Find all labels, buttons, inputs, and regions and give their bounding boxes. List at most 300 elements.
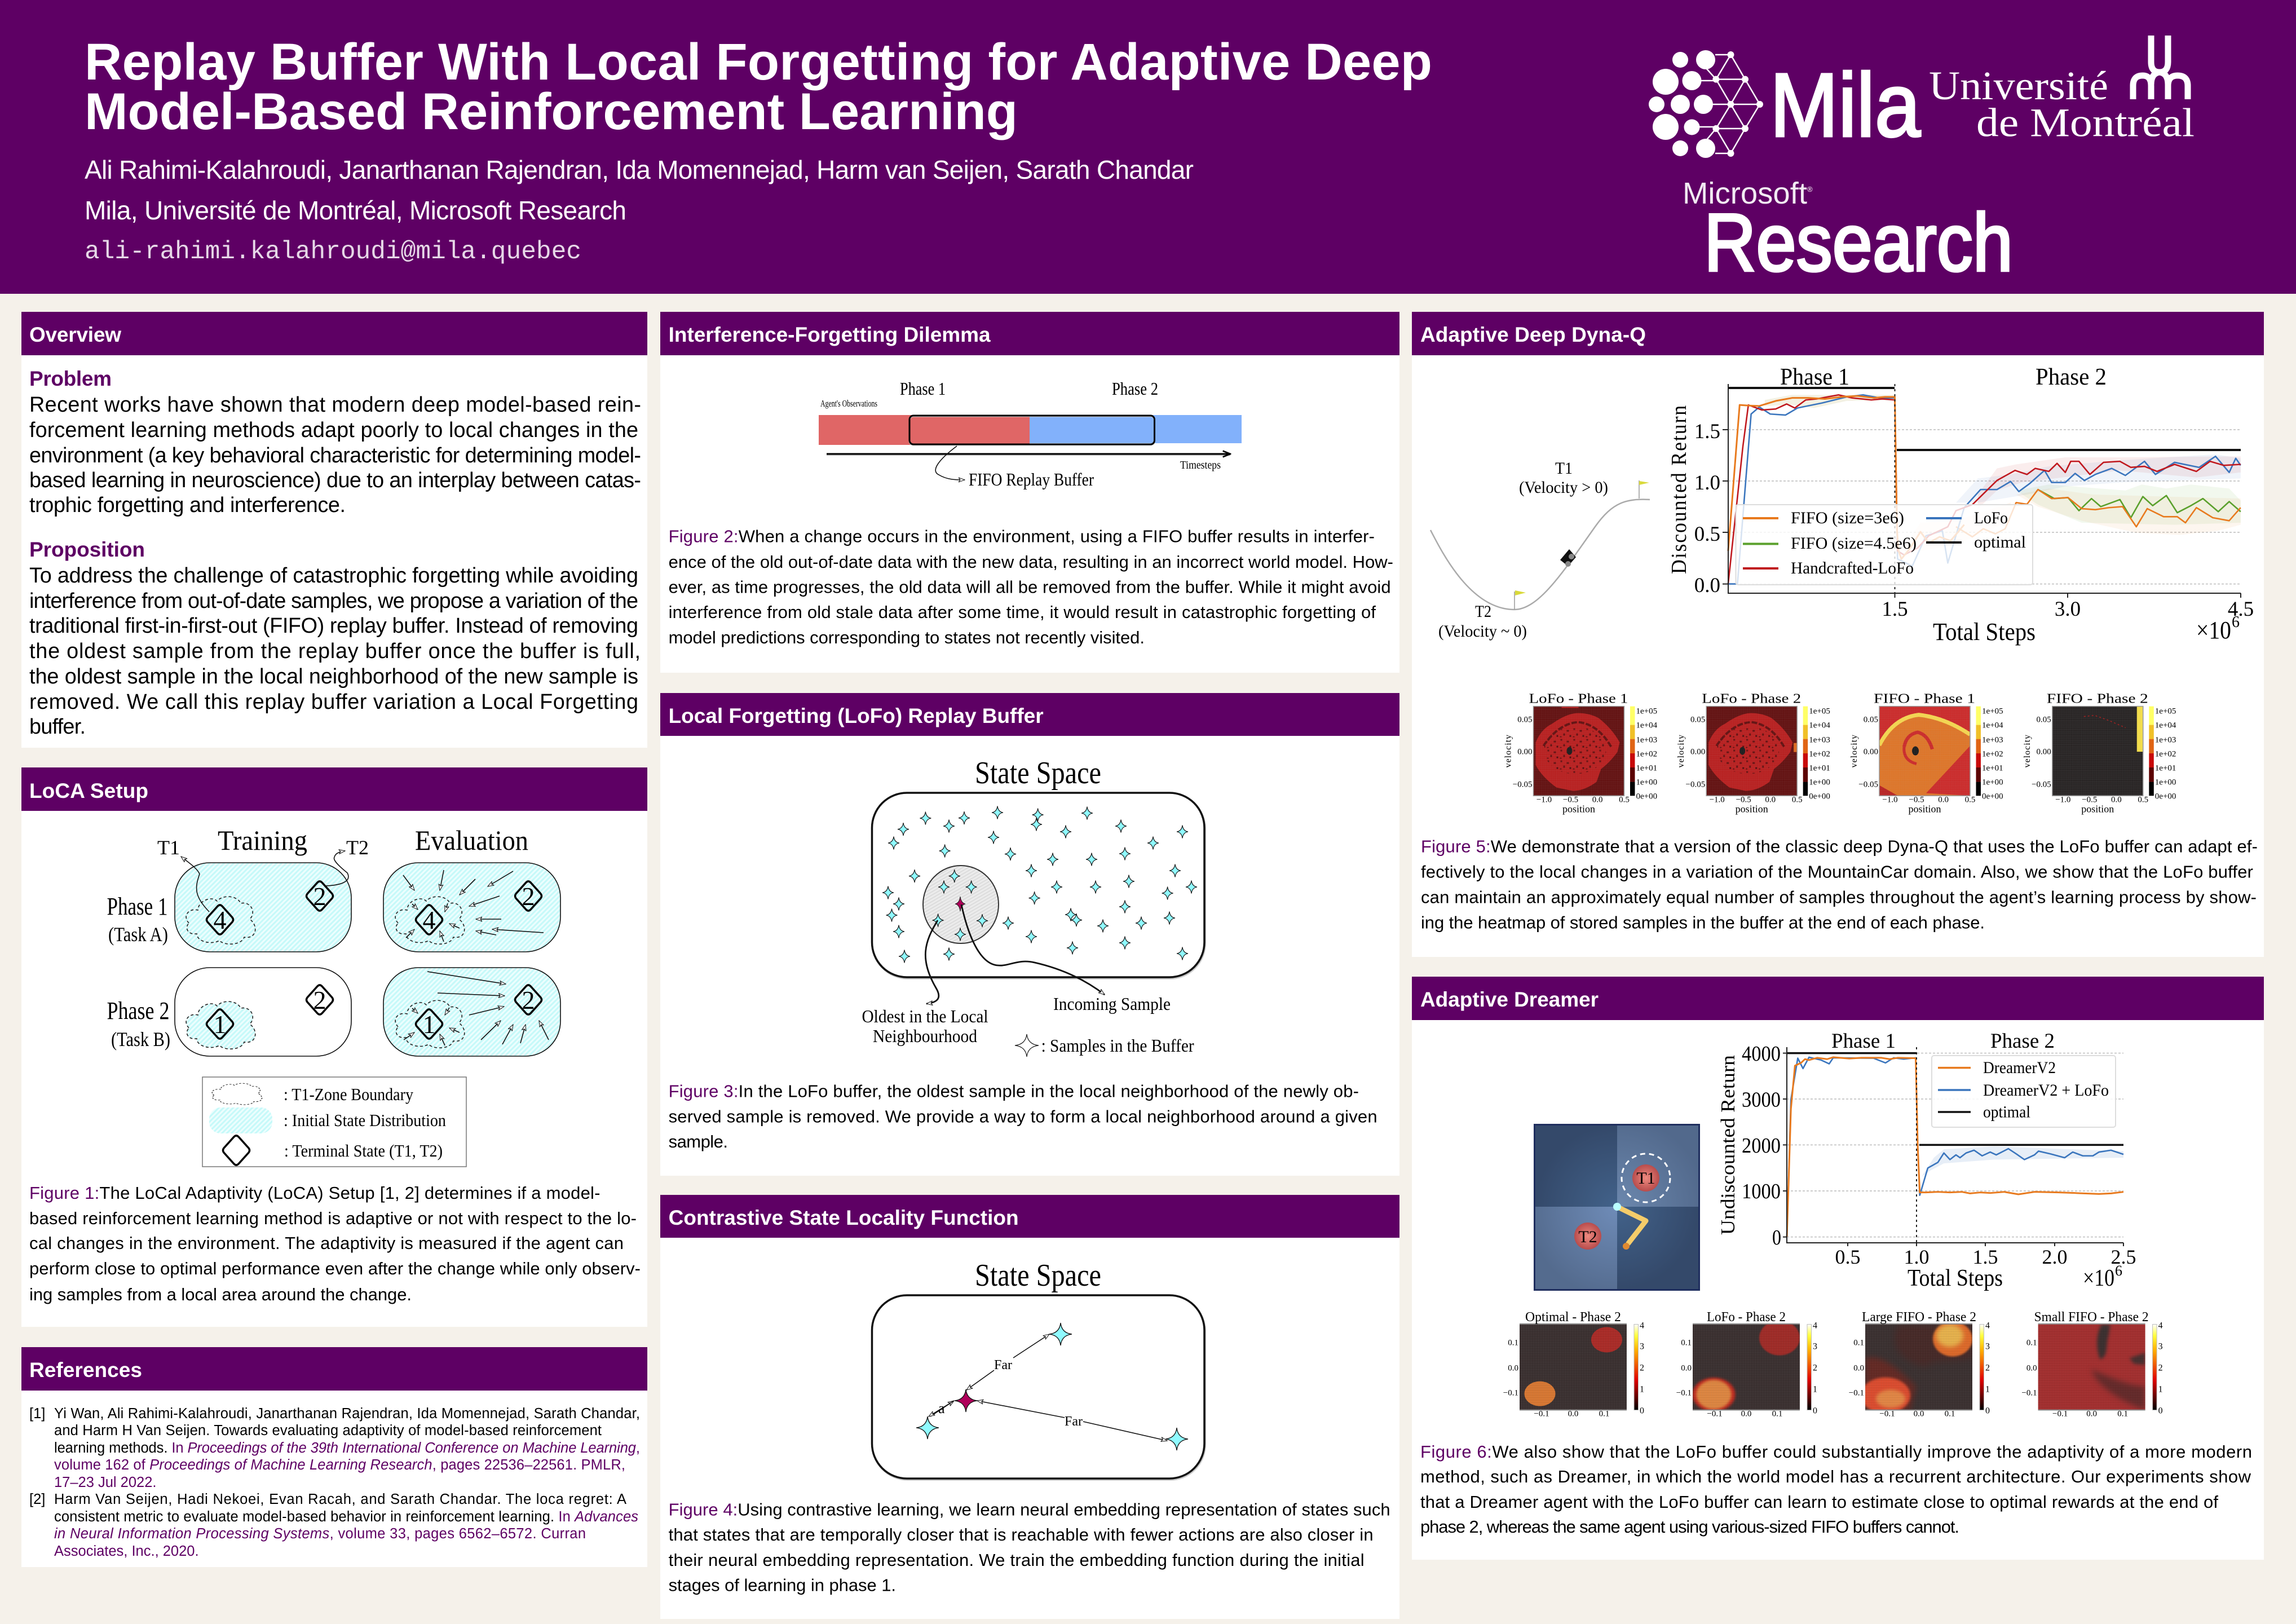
line chart: discounted return [1667, 364, 2254, 646]
heatmap: FIFO phase 2: 1e+04 [2155, 721, 2176, 730]
mountain car environment: T1 [1555, 459, 1573, 478]
figure 6 caption: phase 2, whereas the same agent using various-sized FIFO buffers cannot. [1420, 1517, 1959, 1537]
heatmap: LoFo phase 2 [1676, 1310, 1817, 1419]
heatmap: small FIFO phase 2: 4 [2158, 1321, 2163, 1331]
heatmap: large FIFO phase 2: 2 [1985, 1363, 1990, 1373]
figure 5 caption: can maintain an approximately equal number of samples throughout the agent’s learning process by show- [1421, 888, 2257, 907]
axis labels and ticks: 3000 [1742, 1088, 1781, 1112]
reference list: Harm Van Seijen, Hadi Nekoei, Evan Racah, and Sarath Chandar. The loca regret: A [54, 1491, 626, 1507]
axis labels and ticks: ×10 [2083, 1265, 2114, 1291]
figure 5 caption [1421, 837, 2258, 933]
logo: Université de Montréal [1929, 36, 2195, 145]
heatmap: FIFO phase 1: 0.0 [1938, 796, 1949, 805]
heatmap: FIFO phase 2: 1e+00 [2155, 778, 2176, 787]
figure 3 caption: served sample is removed. We provide a way to form a local neighborhood around a given [669, 1106, 1377, 1126]
text: problem: trophic forgetting and interference. [29, 493, 346, 517]
figure 5 caption: ing the heatmap of stored samples in the buffer at the end of each phase. [1421, 913, 1985, 933]
incoming sample star [955, 897, 965, 911]
mountain car environment [1430, 459, 1650, 641]
figure 2 diagram: Agent's Observations [820, 398, 877, 409]
figure 1 legend: : Initial State Distribution [284, 1110, 446, 1130]
axis labels and ticks: 0.5 [1694, 523, 1720, 546]
heatmap: LoFo phase 2: LoFo - Phase 2 [1707, 1310, 1786, 1325]
figure 1 legend: : Terminal State (T1, T2) [284, 1141, 443, 1160]
panel: references [21, 1347, 647, 1567]
affiliations: Mila, Université de Montréal, Microsoft Research [85, 196, 626, 225]
heatmap: LoFo phase 1: 0.05 [1517, 716, 1533, 725]
chart titles: Phase 2 [1990, 1030, 2055, 1053]
figure 1 caption: perform close to optimal performance even after the change while only observ- [29, 1259, 641, 1278]
heatmap: LoFo phase 2: 1e+04 [1809, 721, 1830, 730]
chart titles: Phase 2 [2036, 364, 2107, 390]
figure 1 diagram: 4 [423, 906, 435, 934]
logo: Mila [1649, 50, 1920, 158]
figure 5 caption: fectively to the local changes in a variation of the MountainCar domain. Also, we show that the LoFo buffer [1421, 862, 2253, 882]
figure 2 diagram: FIFO Replay Buffer [969, 469, 1094, 489]
figure 1 diagram: (Task A) [108, 923, 168, 946]
reference list: consistent metric to evaluate model-based behavior in reinforcement learning. In Advances [54, 1509, 638, 1525]
axis labels and ticks: 6 [2232, 614, 2240, 631]
heatmap: FIFO phase 1: 1e+05 [1982, 707, 2003, 716]
figure 2 diagram: Phase 1 [900, 378, 946, 399]
heatmap: FIFO phase 1: velocity [1849, 734, 1859, 767]
figure 1 legend [202, 1077, 466, 1167]
heatmap: large FIFO phase 2: −0.1 [1879, 1410, 1895, 1419]
axis labels and ticks: 0.0 [1694, 574, 1720, 597]
figure 2 caption: ever, as time progresses, the old data will all be removed from the buffer. While it might avoid [669, 577, 1391, 597]
text: problem: environment (a key behavioral characteristic for determining model- [29, 444, 641, 467]
heatmap: small FIFO phase 2: 3 [2158, 1342, 2163, 1352]
heatmap: LoFo phase 1: LoFo - Phase 1 [1529, 692, 1628, 707]
heading: LoCA setup: LoCA Setup [29, 779, 148, 802]
figure 2 diagram: Phase 2 [1112, 378, 1158, 399]
heatmap: optimal phase 2: 4 [1640, 1321, 1644, 1331]
heatmap: FIFO phase 2: position [2081, 804, 2114, 815]
heatmap: FIFO phase 2: 1e+02 [2155, 750, 2176, 759]
heatmap: LoFo phase 1: 1e+04 [1636, 721, 1658, 730]
panel: adaptive deep dyna-q [1412, 312, 2264, 957]
text: proposition: removed. We call this replay buffer variation a Local Forgetting [29, 690, 638, 714]
heatmap: optimal phase 2: Optimal - Phase 2 [1525, 1310, 1621, 1325]
figure 6 caption [1420, 1442, 2252, 1537]
heatmap: LoFo phase 1: 1e+05 [1636, 707, 1657, 716]
text: problem: Recent works have shown that modern deep model-based rein- [29, 393, 641, 417]
heatmap: LoFo phase 2: 0.0 [1681, 1364, 1692, 1373]
heatmap: optimal phase 2: 0.1 [1508, 1339, 1518, 1348]
heatmap: LoFo phase 2: 1e+00 [1809, 778, 1830, 787]
figure 2 diagram [819, 378, 1242, 489]
axis labels and ticks: 1000 [1742, 1180, 1781, 1203]
heatmap: LoFo phase 2: 1e+05 [1809, 707, 1830, 716]
heatmap: LoFo phase 2: 2 [1813, 1363, 1817, 1373]
axis labels and ticks: 1.0 [1694, 471, 1720, 495]
figure 1 diagram: 2 [314, 986, 326, 1014]
heatmap: LoFo phase 1: 0.00 [1517, 748, 1533, 757]
heatmap: small FIFO phase 2: 0.0 [2086, 1410, 2097, 1419]
text: proposition: interference from out-of-date samples, we propose a variation of the [29, 589, 638, 613]
axis labels and ticks: 0.5 [1835, 1246, 1861, 1268]
figure 1 diagram: 1 [213, 1010, 227, 1039]
heatmap: large FIFO phase 2: 0.1 [1853, 1339, 1864, 1348]
reference list: learning methods. In Proceedings of the 39th International Conference on Machine Learning, [54, 1440, 640, 1456]
figure 4 caption: stages of learning in phase 1. [669, 1576, 896, 1595]
figure 4 caption: that states that are temporally closer that is reachable with fewer actions are also closer in [669, 1525, 1374, 1544]
figure 1 diagram: Phase 1 [107, 893, 168, 920]
text: problem [29, 393, 641, 517]
heatmap: FIFO phase 2: 0.5 [2138, 796, 2148, 805]
axis labels and ticks: 2.5 [2111, 1246, 2136, 1268]
chart titles [1831, 1030, 2055, 1053]
figure 6 caption: that a Dreamer agent with the LoFo buffer can learn to estimate close to optimal rewards at the end of [1420, 1492, 2218, 1512]
heatmap: large FIFO phase 2: 1 [1985, 1385, 1990, 1394]
figure 3 diagram: Oldest in the Local [862, 1006, 988, 1026]
figure 4 diagram: State Space [975, 1258, 1101, 1293]
figure 1 diagram [107, 824, 560, 1056]
heatmap: LoFo phase 2: 0.0 [1765, 796, 1776, 805]
figure 1 diagram: Phase 2 [107, 997, 169, 1025]
heatmap: LoFo phase 1 [1503, 692, 1658, 815]
heatmap: FIFO phase 2: 0.00 [2037, 748, 2051, 757]
heatmap: LoFo phase 2: velocity [1676, 734, 1686, 767]
panel: contrastive state locality function [660, 1195, 1399, 1619]
heatmap: FIFO phase 2: 0.05 [2037, 716, 2051, 725]
heatmap: LoFo phase 1: 1e+00 [1636, 778, 1657, 787]
heatmap: FIFO phase 1: FIFO - Phase 1 [1874, 692, 1975, 707]
heatmap: FIFO phase 2: −0.5 [2082, 796, 2097, 805]
heatmap: FIFO phase 1: 1e+03 [1982, 736, 2003, 745]
reference list [29, 1406, 640, 1559]
heatmap: LoFo phase 1: 0.0 [1592, 796, 1602, 805]
figure 1 legend: : T1-Zone Boundary [284, 1084, 413, 1104]
figure 3 diagram: : Samples in the Buffer [1041, 1035, 1194, 1056]
logo: Microsoft Research: Microsoft [1683, 176, 1807, 210]
axis labels and ticks: 0 [1772, 1226, 1781, 1250]
heatmap: LoFo phase 2 [1676, 692, 1830, 815]
heatmap: FIFO phase 1: position [1908, 804, 1941, 815]
figure 1 diagram: 4 [213, 906, 227, 934]
heatmap: LoFo phase 2: 3 [1813, 1342, 1817, 1352]
heatmap: small FIFO phase 2: 0 [2158, 1406, 2163, 1416]
figure 4 diagram: Far [994, 1358, 1012, 1373]
heatmap: FIFO phase 1: 0e+00 [1982, 792, 2003, 801]
figure 1 diagram: 2 [522, 882, 535, 911]
axis labels and ticks: 1.5 [1882, 598, 1908, 621]
reference list: 17–23 Jul 2022. [54, 1475, 157, 1490]
heatmap: LoFo phase 2: 4 [1813, 1321, 1817, 1331]
heatmap: large FIFO phase 2: 0.1 [1945, 1410, 1955, 1419]
heatmap: large FIFO phase 2: −0.1 [1849, 1389, 1864, 1398]
figure 3 caption: Figure 3:In the LoFo buffer, the oldest sample in the local neighborhood of the newly ob- [669, 1081, 1359, 1101]
text: problem: forcement learning methods adapt poorly to local changes in the [29, 418, 638, 442]
figure 1 diagram: T1 [157, 836, 180, 859]
axis labels and ticks: 6 [2115, 1263, 2122, 1279]
heatmap: LoFo phase 2: 0.00 [1690, 748, 1705, 757]
figure 2 caption: model predictions corresponding to states not recently visited. [669, 628, 1145, 647]
heatmap: LoFo phase 2: 1e+01 [1809, 764, 1830, 773]
series curves [1787, 1057, 2123, 1237]
heatmap: FIFO phase 2: velocity [2023, 734, 2032, 767]
series curves [1728, 395, 2241, 584]
heatmap: FIFO phase 1: −0.5 [1909, 796, 1924, 805]
figure 1 diagram: Evaluation [415, 824, 528, 856]
title: Replay Buffer With Local Forgetting for Adaptive Deep [85, 33, 1432, 91]
logo: Microsoft Research: Research [1704, 197, 2013, 288]
chart legend: FIFO (size=4.5e6) [1791, 534, 1917, 553]
figure 3 diagram: State Space [975, 756, 1101, 791]
heatmap: large FIFO phase 2: 4 [1985, 1321, 1990, 1331]
mountain car environment: (Velocity ~ 0) [1438, 622, 1527, 641]
figure 2 caption: ence of the old out-of-date data with the new data, resulting in an incorrect world model. How- [669, 552, 1393, 572]
panel: LoCA setup [21, 767, 647, 1327]
subheading: proposition: Proposition [29, 538, 145, 561]
heatmap: FIFO phase 1: 1e+01 [1982, 764, 2003, 773]
heatmap: FIFO phase 1: 1e+00 [1982, 778, 2003, 787]
axis labels and ticks: Discounted Return [1667, 404, 1691, 574]
figure 6 caption: method, such as Dreamer, in which the world model has a recurrent architecture. Our experiments show [1420, 1467, 2251, 1486]
axis labels and ticks: 1.5 [1694, 420, 1720, 443]
text: proposition: To address the challenge of catastrophic forgetting while avoiding [29, 564, 638, 588]
axis labels and ticks: 3.0 [2055, 598, 2081, 621]
figure 3 diagram: Incoming Sample [1053, 994, 1171, 1014]
heatmap: large FIFO phase 2 [1849, 1310, 1990, 1419]
heading: overview: Overview [29, 323, 121, 346]
heatmap: optimal phase 2: 0 [1640, 1406, 1644, 1416]
heatmap: LoFo phase 2: −0.5 [1736, 796, 1751, 805]
figure 1 diagram: 2 [522, 986, 535, 1014]
samples in buffer [882, 806, 1197, 963]
heatmap: small FIFO phase 2: 0.1 [2026, 1339, 2037, 1348]
heatmap: FIFO phase 2: 0e+00 [2155, 792, 2176, 801]
heatmap: LoFo phase 2: 1e+03 [1809, 736, 1830, 745]
heatmap: small FIFO phase 2: 2 [2158, 1363, 2163, 1373]
text: proposition: the oldest sample in the local neighborhood of the new sample is [29, 665, 638, 689]
logo: Université de Montréal: de Montréal [1976, 100, 2195, 145]
figure 3 diagram: Neighbourhood [873, 1026, 977, 1046]
heatmap: FIFO phase 2: FIFO - Phase 2 [2047, 692, 2148, 707]
figure 1 caption: cal changes in the environment. The adaptivity is measured if the agent can [29, 1233, 624, 1253]
text: proposition: buffer. [29, 715, 86, 739]
heatmap: optimal phase 2: 0.0 [1508, 1364, 1518, 1373]
figure 2 diagram: Timesteps [1180, 459, 1221, 471]
heatmap: LoFo phase 2: 0 [1813, 1406, 1817, 1416]
chart legend: DreamerV2 [1983, 1058, 2056, 1077]
axis labels and ticks: 2000 [1742, 1134, 1781, 1158]
panel: adaptive dreamer [1412, 977, 2264, 1560]
figure 1 caption: Figure 1:The LoCal Adaptivity (LoCA) Setup [1, 2] determines if a model- [29, 1183, 600, 1203]
chart legend [1932, 1056, 2116, 1127]
heatmap: LoFo phase 2: 1e+02 [1809, 750, 1830, 759]
heatmap: FIFO phase 2: 1e+03 [2155, 736, 2176, 745]
heatmap: LoFo phase 2: 0e+00 [1809, 792, 1830, 801]
heatmap: small FIFO phase 2: −0.1 [2052, 1410, 2068, 1419]
heatmap: optimal phase 2 [1503, 1310, 1644, 1419]
figure 1 diagram: (Task B) [111, 1028, 170, 1051]
heatmap: optimal phase 2: 0.1 [1599, 1410, 1609, 1419]
axis labels and ticks: 4000 [1742, 1042, 1781, 1066]
heatmap: small FIFO phase 2: Small FIFO - Phase 2 [2034, 1310, 2149, 1325]
figure 2 caption: interference from old stale data after some time, it would result in catastrophic forgetting of [669, 602, 1376, 622]
heatmap: small FIFO phase 2: −0.1 [2021, 1389, 2037, 1398]
figure 1 caption: ing samples from a local area around the change. [29, 1285, 412, 1304]
heatmap: FIFO phase 2: −0.05 [2032, 780, 2051, 789]
heatmap: FIFO phase 1: 1e+02 [1982, 750, 2003, 759]
reference list: Associates, Inc., 2020. [54, 1543, 199, 1559]
figure 3 caption: sample. [669, 1132, 728, 1151]
heatmap: FIFO phase 1: 0.05 [1864, 716, 1878, 725]
heatmap: large FIFO phase 2: Large FIFO - Phase 2 [1862, 1310, 1976, 1325]
figure 4 diagram [872, 1258, 1205, 1480]
heatmap: large FIFO phase 2: 0.0 [1853, 1364, 1864, 1373]
figure 1 caption [29, 1183, 641, 1304]
reference list: volume 162 of Proceedings of Machine Learning Research, pages 22536–22561. PMLR, [54, 1457, 625, 1473]
title: Model-Based Reinforcement Learning [85, 83, 1018, 140]
heatmap: FIFO phase 2: −1.0 [2055, 796, 2070, 805]
chart legend: optimal [1974, 533, 2026, 551]
header banner [0, 0, 2296, 294]
reacher environment image [1534, 1124, 1700, 1291]
figure 1 diagram: T2 [346, 836, 369, 859]
panel: local forgetting replay buffer [660, 693, 1399, 1176]
heatmap: small FIFO phase 2: 0.1 [2117, 1410, 2128, 1419]
chart legend: LoFo [1974, 509, 2008, 527]
heatmap: LoFo phase 1: −1.0 [1536, 796, 1552, 805]
axis labels and ticks: 1.5 [1972, 1246, 1998, 1268]
text: proposition [29, 564, 641, 739]
axis labels and ticks: ×10 [2196, 616, 2231, 644]
heatmap: LoFo phase 1: 0.5 [1619, 796, 1630, 805]
text: problem: based learning in neuroscience) due to an interplay between catas- [29, 469, 641, 492]
panel: interference-forgetting dilemma [660, 312, 1399, 673]
figure 3 caption [669, 1081, 1377, 1151]
title [85, 33, 1432, 140]
reference list: and Harm H Van Seijen. Towards evaluating adaptivity of model-based reinforcement [54, 1423, 602, 1438]
heatmap: LoFo phase 1: −0.05 [1513, 780, 1533, 789]
heatmap: LoFo phase 1: 1e+03 [1636, 736, 1657, 745]
figure 1 diagram: Training [218, 824, 307, 856]
subheading: problem: Problem [29, 367, 112, 390]
heatmap: FIFO phase 2: 1e+05 [2155, 707, 2176, 716]
axis labels and ticks: Total Steps [1908, 1265, 2003, 1291]
heatmap: small FIFO phase 2 [2021, 1310, 2163, 1419]
heatmap: LoFo phase 2: 1 [1813, 1385, 1817, 1394]
heatmap: optimal phase 2: 0.0 [1568, 1410, 1578, 1419]
chart titles: Phase 1 [1831, 1030, 1896, 1053]
mountain car environment: T2 [1475, 602, 1491, 621]
panel: overview [21, 312, 647, 748]
heatmap: LoFo phase 2: position [1736, 804, 1768, 815]
text: proposition: the oldest sample from the replay buffer once the buffer is full, [29, 639, 641, 663]
reference list: Yi Wan, Ali Rahimi-Kalahroudi, Janarthanan Rajendran, Ida Momennejad, Sarath Chandar, [54, 1406, 640, 1422]
heatmap: optimal phase 2: −0.1 [1534, 1410, 1549, 1419]
heatmap: LoFo phase 1: 0e+00 [1636, 792, 1657, 801]
heatmap: LoFo phase 1: position [1562, 804, 1595, 815]
figure 1 diagram: 2 [314, 882, 326, 911]
figure 5 caption: Figure 5:We demonstrate that a version of the classic deep Dyna-Q that uses the LoFo buffer can adapt ef- [1421, 837, 2258, 857]
heading: local forgetting: Local Forgetting (LoFo) Replay Buffer [669, 704, 1044, 727]
figure 4 diagram: Far [1065, 1414, 1083, 1429]
figure 2 caption: Figure 2:When a change occurs in the environment, using a FIFO buffer results in interfer- [669, 527, 1375, 546]
text: proposition: traditional first-in-first-out (FIFO) replay buffer. Instead of removing [29, 614, 638, 638]
axis labels and ticks: Total Steps [1933, 618, 2036, 646]
heatmap: optimal phase 2: 1 [1640, 1385, 1644, 1394]
reference list: [1] [29, 1406, 45, 1422]
heatmap: FIFO phase 2 [2023, 692, 2176, 815]
figure 4 caption: their neural embedding representation. We train the embedding function during the initial [669, 1550, 1365, 1570]
logo: Mila: Mila [1770, 54, 1920, 156]
heatmap: LoFo phase 2: 0.1 [1772, 1410, 1782, 1419]
axis labels and ticks: Undiscounted Return [1717, 1055, 1739, 1235]
chart titles [1780, 364, 2107, 390]
chart legend: DreamerV2 + LoFo [1983, 1081, 2109, 1100]
figure 4 caption: Figure 4:Using contrastive learning, we learn neural embedding representation of states such [669, 1500, 1390, 1519]
logo: Microsoft Research [1683, 176, 2013, 288]
heatmap: LoFo phase 2: −0.1 [1676, 1389, 1692, 1398]
heatmap: FIFO phase 1: −1.0 [1882, 796, 1898, 805]
reference list: [2] [29, 1491, 45, 1507]
heatmap: LoFo phase 2: 0.05 [1690, 716, 1705, 725]
axis labels and ticks [1667, 404, 2254, 646]
heatmap: LoFo phase 2: 0.0 [1741, 1410, 1751, 1419]
heatmap: LoFo phase 1: 1e+02 [1636, 750, 1657, 759]
heatmap: FIFO phase 1: 1e+04 [1982, 721, 2003, 730]
heatmap: LoFo phase 2: 0.1 [1681, 1339, 1692, 1348]
figure 3 diagram [862, 756, 1205, 1057]
heatmap: LoFo phase 1: velocity [1503, 734, 1513, 767]
heatmap: FIFO phase 2: 0.0 [2111, 796, 2122, 805]
heading: adaptive dreamer: Adaptive Dreamer [1420, 988, 1599, 1011]
authors: Ali Rahimi-Kalahroudi, Janarthanan Rajendran, Ida Momennejad, Harm van Seijen, Sarath Chandar [85, 155, 1194, 184]
figure 4 diagram: a [938, 1400, 945, 1416]
logo: Microsoft Research: ® [1807, 185, 1813, 193]
chart legend: optimal [1983, 1103, 2030, 1121]
heatmap: optimal phase 2: −0.1 [1503, 1389, 1518, 1398]
line chart: undiscounted return [1717, 1030, 2136, 1291]
chart legend: Handcrafted-LoFo [1791, 559, 1914, 577]
heatmap: optimal phase 2: 2 [1640, 1363, 1644, 1373]
figure 6 caption: Figure 6:We also show that the LoFo buffer could substantially improve the adaptivity of a more modern [1420, 1442, 2252, 1462]
figure 1 diagram: 1 [423, 1010, 435, 1039]
heatmap: LoFo phase 2: −0.05 [1685, 780, 1705, 789]
axis labels and ticks [1717, 1042, 2136, 1291]
heatmap: LoFo phase 2: 0.5 [1792, 796, 1803, 805]
reference list: in Neural Information Processing Systems, volume 33, pages 6562–6572. Curran [54, 1526, 586, 1542]
figure 1 caption: based reinforcement learning method is adaptive or not with respect to the lo- [29, 1208, 637, 1228]
reacher environment image: T1 [1636, 1169, 1655, 1188]
email: ali-rahimi.kalahroudi@mila.quebec [85, 238, 581, 266]
heading: interference-forgetting dilemma: Interference-Forgetting Dilemma [669, 323, 991, 346]
axis labels and ticks: 2.0 [2042, 1246, 2067, 1268]
heatmap: FIFO phase 2: 1e+01 [2155, 764, 2176, 773]
axis labels and ticks: 1.0 [1904, 1246, 1929, 1268]
heatmap: large FIFO phase 2: 0 [1985, 1406, 1990, 1416]
heatmap: large FIFO phase 2: 0.0 [1914, 1410, 1924, 1419]
reacher environment image: T2 [1578, 1228, 1597, 1246]
mountain car environment: (Velocity > 0) [1519, 478, 1608, 497]
heatmap: small FIFO phase 2: 1 [2158, 1385, 2163, 1394]
figure 4 caption [669, 1500, 1390, 1595]
heatmap: LoFo phase 2: LoFo - Phase 2 [1702, 692, 1801, 707]
logo: Université de Montréal: Université [1929, 63, 2108, 108]
heatmap: optimal phase 2: 3 [1640, 1342, 1644, 1352]
heatmap: large FIFO phase 2: 3 [1985, 1342, 1990, 1352]
heatmap: LoFo phase 2: −0.1 [1707, 1410, 1723, 1419]
chart legend: FIFO (size=3e6) [1791, 509, 1904, 527]
chart legend [1736, 505, 2033, 585]
chart titles: Phase 1 [1780, 364, 1849, 390]
heatmap: FIFO phase 1: 0.00 [1864, 748, 1878, 757]
figure 2 caption [669, 527, 1393, 647]
heatmap: FIFO phase 1 [1849, 692, 2003, 815]
